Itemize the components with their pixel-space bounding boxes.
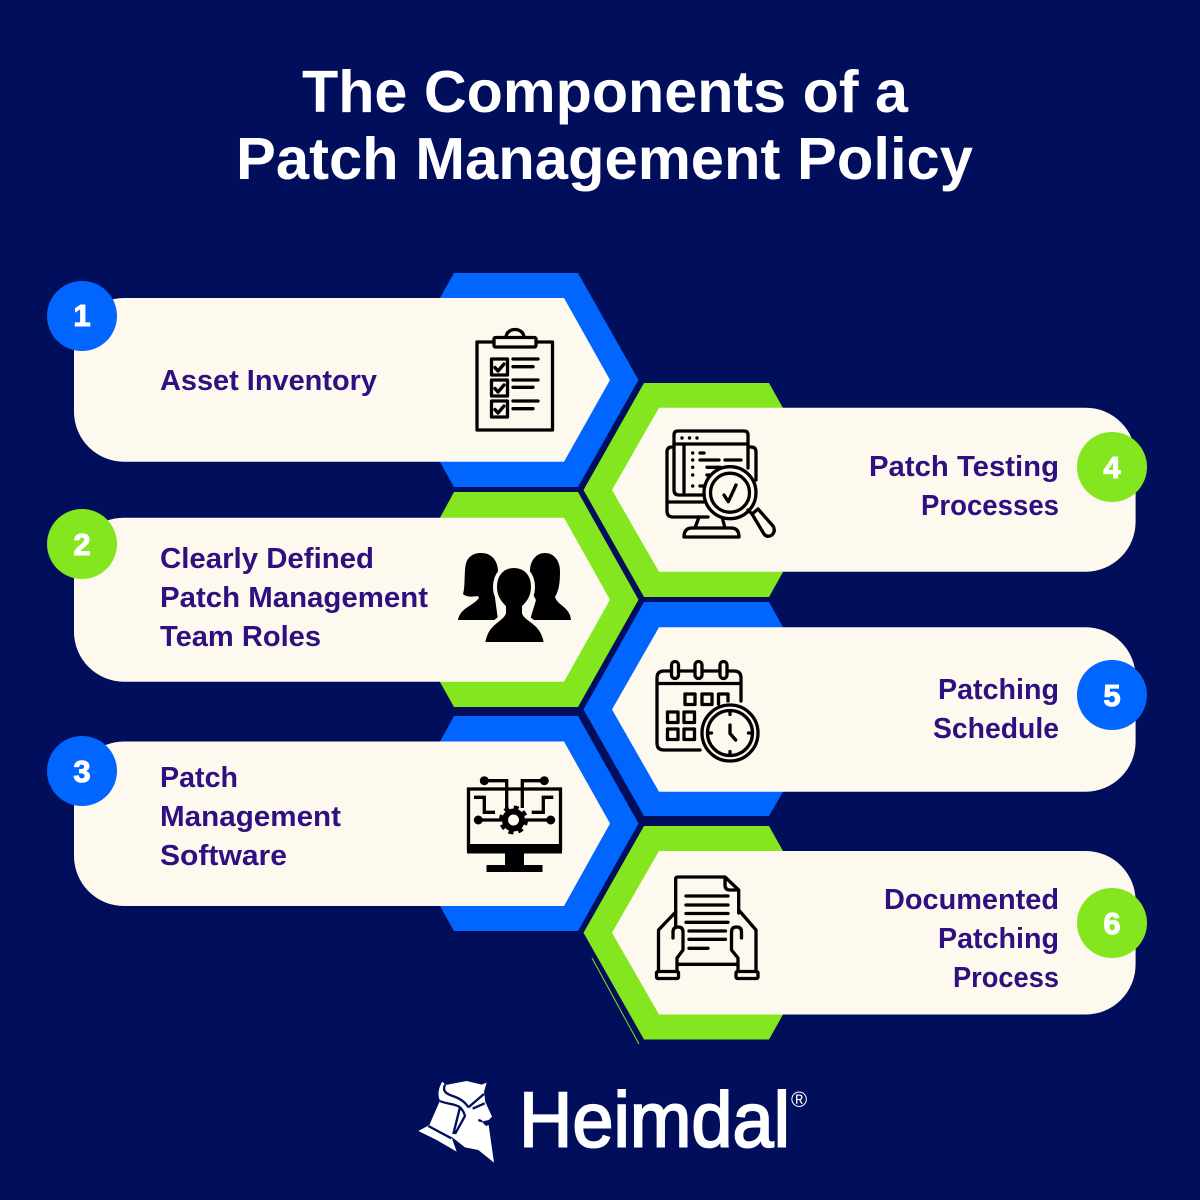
badge 2 [47, 509, 117, 579]
badge 5: 5 [1103, 678, 1121, 713]
logo: Heimdal [418, 1076, 807, 1164]
badge 1 [47, 281, 117, 351]
icon: monitor with magnifier [667, 431, 774, 537]
thin green sliver [592, 958, 639, 1044]
green hexagon backing [584, 826, 783, 1040]
panel: Asset Inventory [47, 273, 638, 487]
card [612, 408, 1136, 572]
label: Software [160, 840, 287, 872]
icon: viking head [418, 1081, 494, 1163]
label [160, 762, 341, 872]
panel: Documented Patching Process [584, 826, 1147, 1044]
blue hexagon backing [440, 273, 638, 487]
label [869, 451, 1059, 522]
green hexagon backing [440, 492, 638, 707]
icon: three people [458, 553, 571, 644]
label [933, 674, 1059, 745]
label: Management [160, 801, 341, 833]
label [884, 884, 1059, 994]
panel: Patch Testing Processes [584, 383, 1147, 597]
card [612, 851, 1136, 1014]
badge 3 [47, 736, 117, 806]
icon: clipboard checklist [477, 330, 552, 430]
title: Patch Management Policy [236, 126, 973, 192]
label: Patch Testing [869, 451, 1059, 483]
panel: Patching Schedule [584, 602, 1147, 816]
panel: Patch Management Software [47, 716, 638, 931]
label: Patching [938, 674, 1059, 706]
label: Schedule [933, 713, 1059, 745]
icon: monitor with gear and circuit [467, 776, 562, 872]
icon: hands holding document [656, 877, 758, 978]
badge 5 [1077, 660, 1147, 730]
label: Patch [160, 762, 238, 794]
blue hexagon backing [584, 602, 783, 816]
label: Asset Inventory [160, 365, 377, 397]
label: Team Roles [160, 621, 321, 653]
label: Clearly Defined [160, 543, 374, 575]
label: Patching [938, 923, 1059, 955]
icon: calendar with clock [657, 662, 758, 761]
badge 4: 4 [1103, 450, 1121, 485]
title [236, 59, 973, 192]
panel: Clearly Defined Patch Management Team Roles [47, 492, 638, 707]
card [612, 627, 1136, 792]
label: Documented [884, 884, 1059, 916]
blue hexagon backing [440, 716, 638, 931]
badge 6 [1077, 888, 1147, 958]
badge 3: 3 [73, 754, 91, 789]
label: Process [953, 962, 1059, 994]
card [74, 742, 610, 906]
title: The Components of a [302, 59, 909, 125]
card [74, 298, 610, 462]
badge 6: 6 [1103, 906, 1121, 941]
badge 4 [1077, 432, 1147, 502]
label [160, 543, 428, 653]
wordmark: Heimdal [519, 1076, 790, 1164]
label: Processes [921, 490, 1059, 522]
badge 2: 2 [73, 527, 91, 562]
card [74, 518, 610, 682]
badge 1: 1 [73, 298, 91, 333]
registered mark: ® [791, 1087, 807, 1112]
label: Patch Management [160, 582, 428, 614]
green hexagon backing [584, 383, 783, 597]
